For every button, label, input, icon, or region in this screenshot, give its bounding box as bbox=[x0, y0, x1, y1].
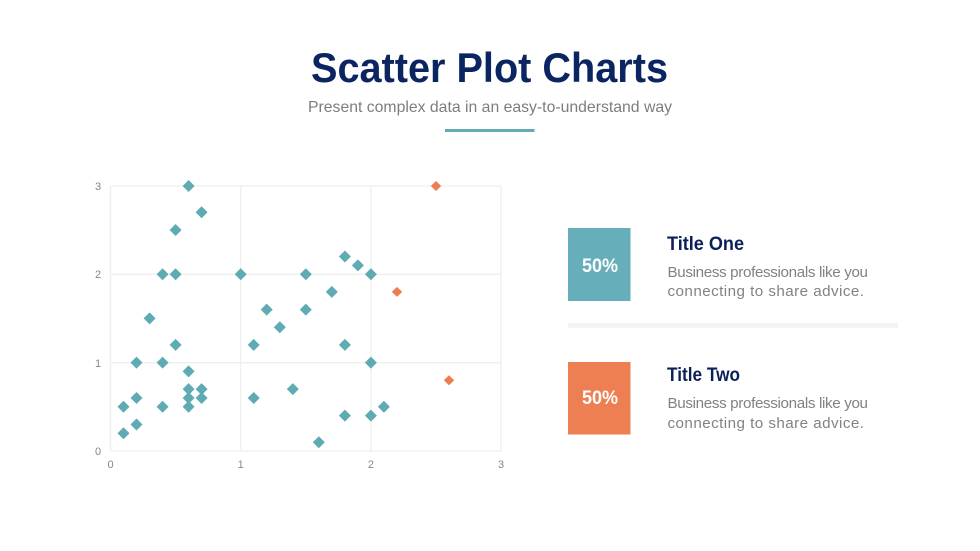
text block: title two description: Business professionals like you bbox=[668, 395, 868, 412]
x axis labels: 2 bbox=[368, 459, 374, 471]
heading: title two: Title Two bbox=[667, 365, 740, 386]
teal data series bbox=[118, 180, 390, 448]
orange percentage box: 50% bbox=[582, 388, 618, 409]
teal percentage box bbox=[568, 228, 630, 301]
text block: title one description: Business professionals like you bbox=[668, 264, 868, 281]
y axis labels: 3 bbox=[95, 181, 101, 193]
orange percentage box bbox=[568, 362, 630, 434]
orange data series bbox=[392, 181, 454, 385]
text block: title one description: connecting to share advice. bbox=[668, 283, 864, 300]
x axis labels bbox=[107, 459, 504, 471]
divider bbox=[568, 323, 898, 328]
teal percentage box: 50% bbox=[582, 256, 618, 277]
y axis labels: 2 bbox=[95, 269, 101, 281]
y axis labels: 0 bbox=[95, 446, 101, 458]
x axis labels: 3 bbox=[498, 459, 504, 471]
panel: title two bbox=[568, 362, 868, 434]
subtitle: Present complex data in an easy-to-understand way bbox=[308, 99, 672, 116]
heading: title one: Title One bbox=[667, 234, 744, 255]
y axis labels: 1 bbox=[95, 358, 101, 370]
text block: title two description bbox=[668, 395, 868, 432]
text block: title two description: connecting to share advice. bbox=[668, 415, 864, 432]
title: Scatter Plot Charts bbox=[311, 44, 668, 91]
x axis labels: 1 bbox=[238, 459, 244, 471]
text block: title one description bbox=[668, 264, 868, 300]
panel: title one bbox=[568, 228, 868, 301]
y axis labels bbox=[95, 181, 101, 458]
x axis labels: 0 bbox=[107, 459, 114, 471]
scatter plot chart bbox=[95, 180, 504, 471]
title accent line bbox=[445, 129, 534, 132]
